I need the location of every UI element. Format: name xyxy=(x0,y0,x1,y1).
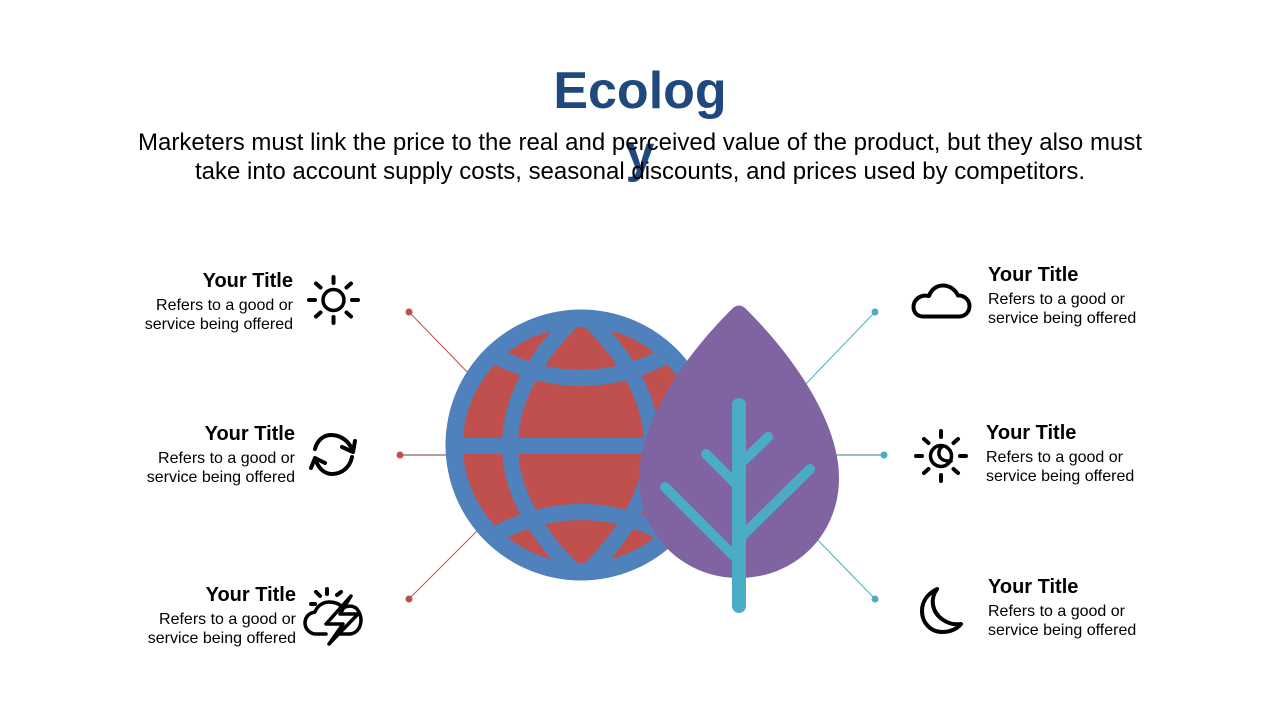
item: left middle text: Refers to a good or xyxy=(158,450,296,467)
item: right middle text: Refers to a good or xyxy=(986,449,1124,466)
item: left middle text: Your Title xyxy=(205,423,295,445)
item: left middle text: service being offered xyxy=(147,469,295,486)
title: Ecolog xyxy=(553,62,727,120)
icon: refresh xyxy=(311,435,355,474)
subtitle: take into account supply costs, seasonal discounts, and prices used by competitors. xyxy=(195,158,1085,185)
icon: sun and moon xyxy=(916,431,966,481)
item: right bottom text: Refers to a good or xyxy=(988,603,1126,620)
item: left top text xyxy=(145,270,294,333)
connector: right bottom xyxy=(812,534,878,602)
item: right middle text: Your Title xyxy=(986,422,1076,444)
connector: right middle xyxy=(830,452,888,458)
item: right top text xyxy=(988,264,1136,327)
item: right top text: service being offered xyxy=(988,310,1136,327)
item: right bottom text: Your Title xyxy=(988,576,1078,598)
item: right bottom text xyxy=(988,576,1136,639)
item: left top text: service being offered xyxy=(145,316,293,333)
item: left middle text xyxy=(147,423,296,486)
item: right bottom text: service being offered xyxy=(988,622,1136,639)
connector: right top xyxy=(800,308,878,390)
item: left bottom text: Refers to a good or xyxy=(159,611,297,628)
item: left top text: Your Title xyxy=(203,270,293,292)
connector: left top xyxy=(406,308,475,380)
item: left bottom text: service being offered xyxy=(148,630,296,647)
item: right middle text xyxy=(986,422,1134,485)
item: right top text: Your Title xyxy=(988,264,1078,286)
item: left bottom text xyxy=(148,584,297,647)
leaf icon xyxy=(639,306,839,606)
globe icon xyxy=(446,310,688,580)
title: y xyxy=(626,125,655,183)
icon: sun xyxy=(309,277,358,323)
icon: moon xyxy=(922,589,961,632)
subtitle xyxy=(138,129,1142,185)
connector: left bottom xyxy=(406,525,483,602)
icon: cloud xyxy=(914,286,970,316)
connector: left middle xyxy=(396,452,455,458)
item: right middle text: service being offered xyxy=(986,468,1134,485)
item: left top text: Refers to a good or xyxy=(156,297,294,314)
item: right top text: Refers to a good or xyxy=(988,291,1126,308)
title xyxy=(553,62,727,183)
icon: storm xyxy=(305,589,361,644)
subtitle: Marketers must link the price to the real and perceived value of the product, but they also must xyxy=(138,129,1142,156)
item: left bottom text: Your Title xyxy=(206,584,296,606)
